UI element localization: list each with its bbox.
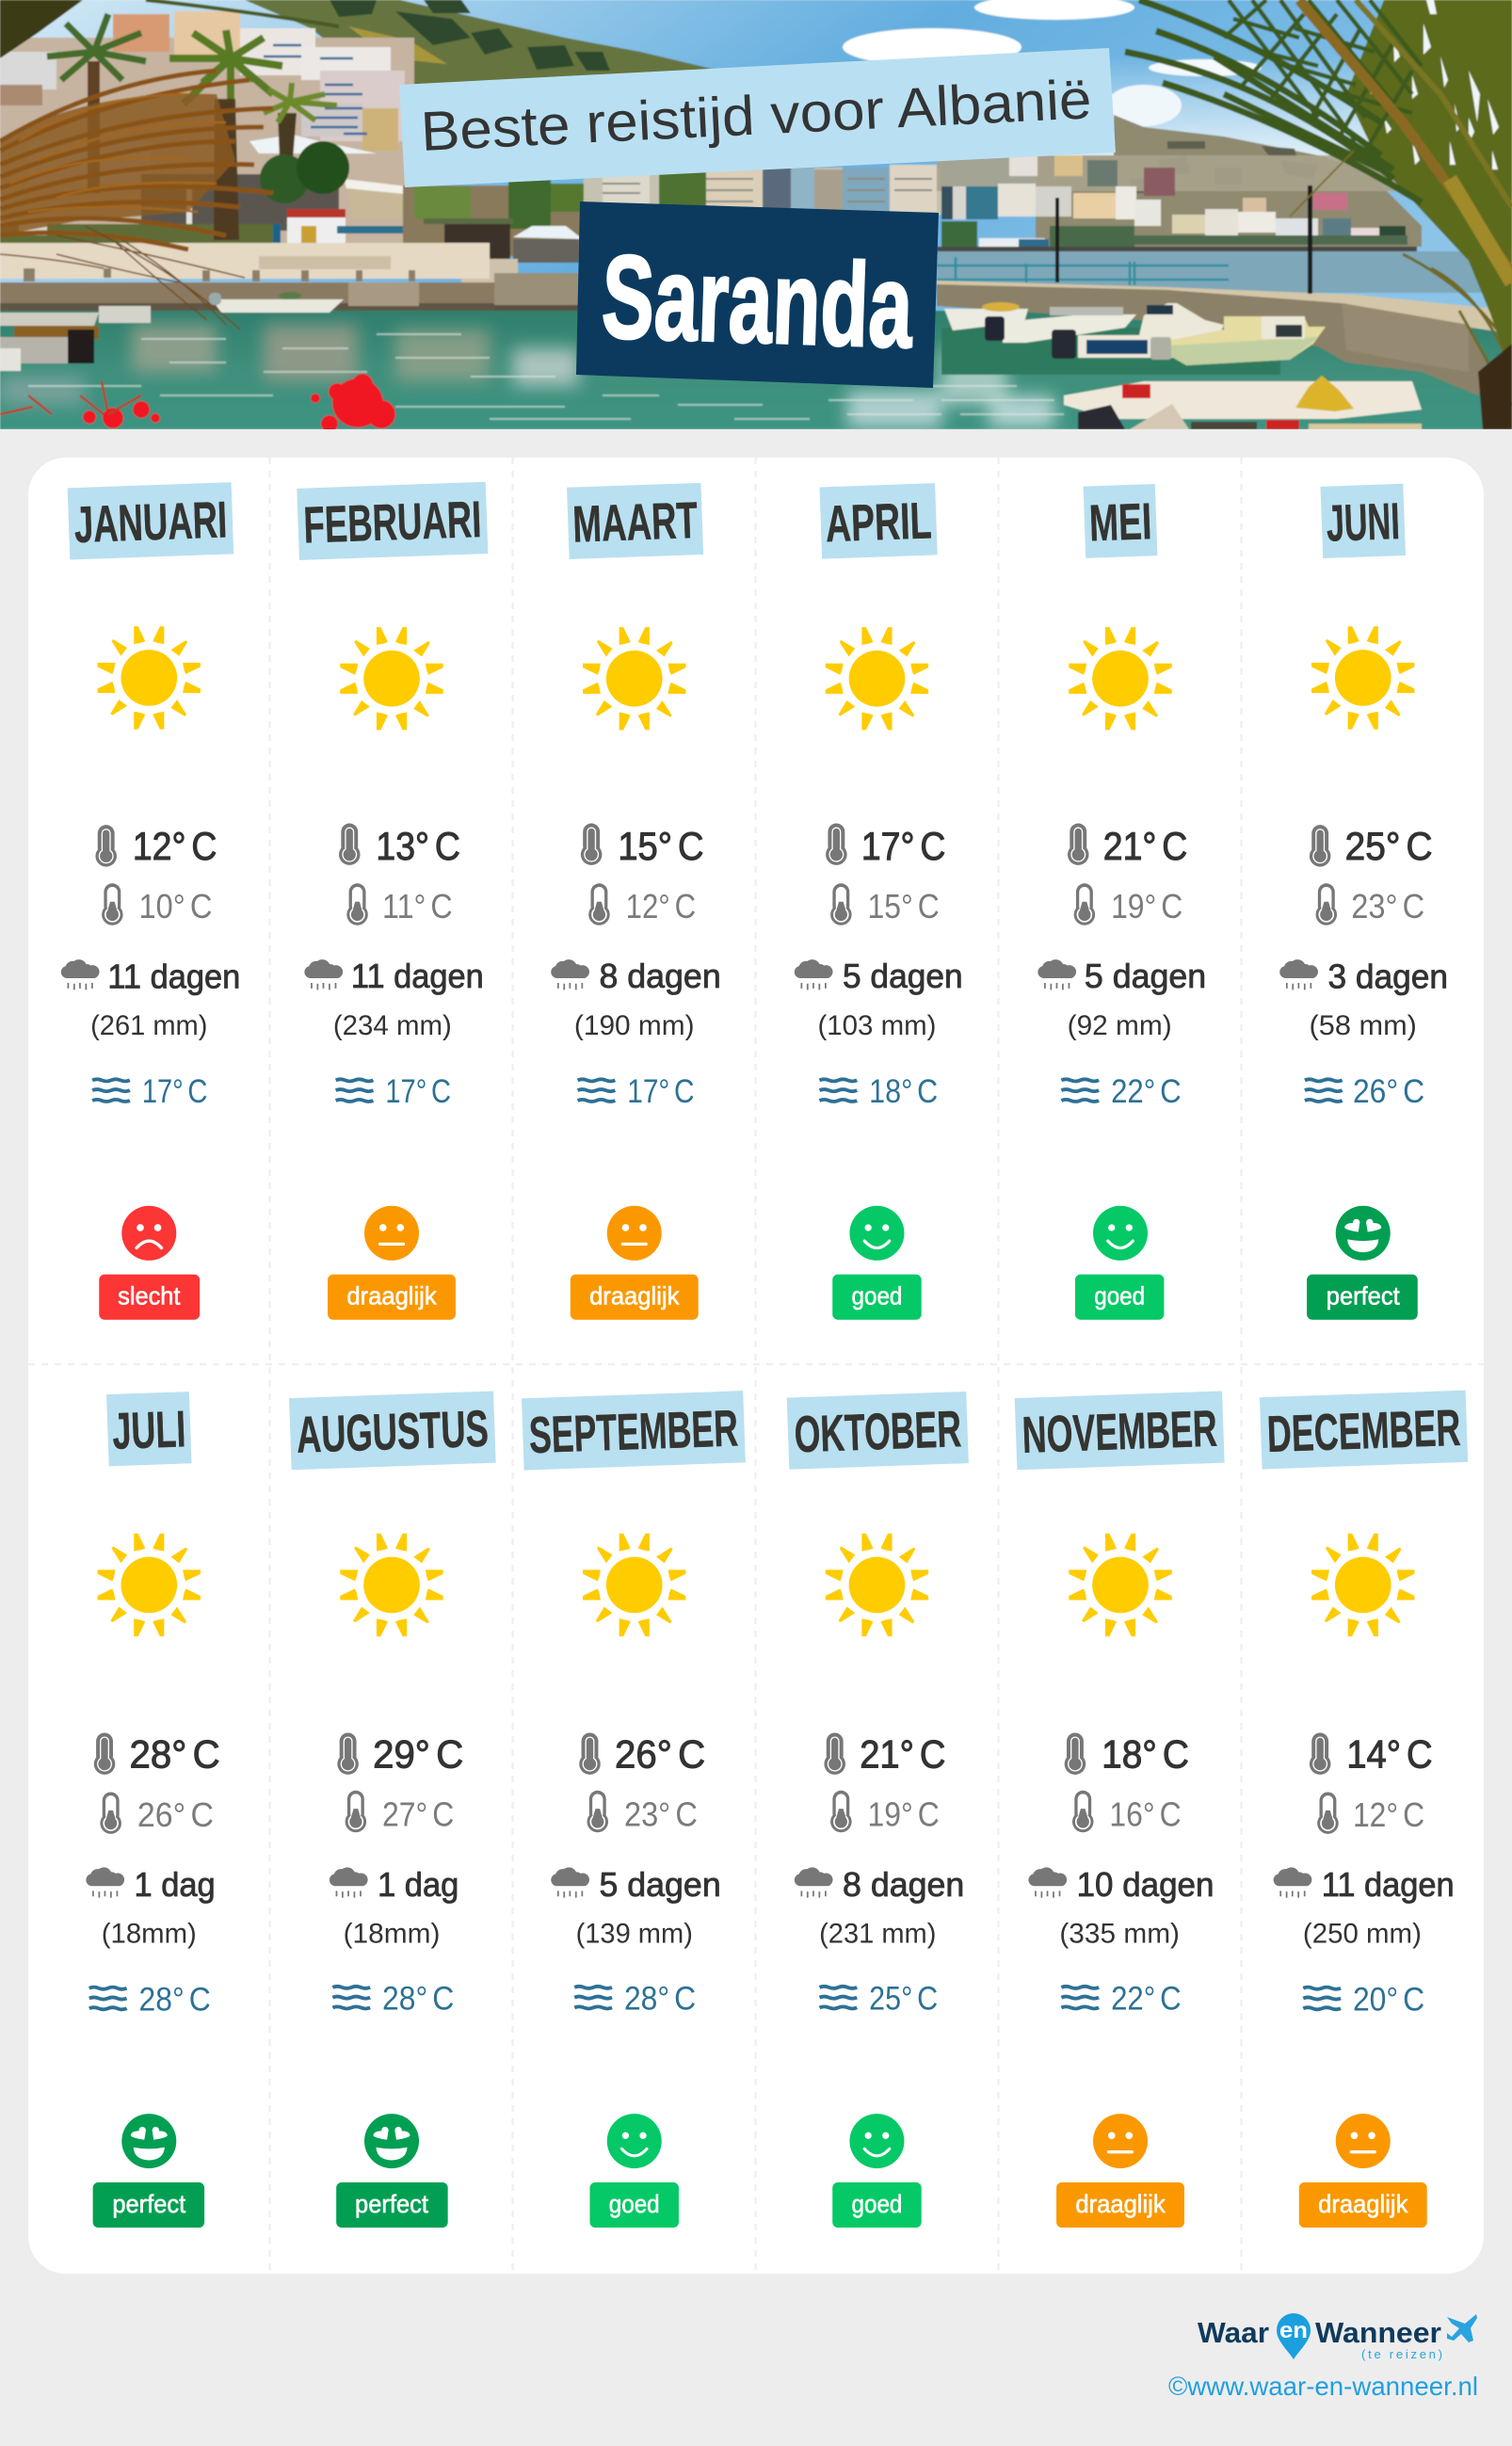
rating: draaglijk (328, 1206, 456, 1320)
icon: sun (1311, 626, 1414, 730)
sea temperature: 28° C (624, 1981, 696, 2018)
heading juli (106, 1392, 192, 1466)
sea temperature: 17° C (385, 1073, 451, 1110)
rating: draaglijk: draaglijk (1318, 2190, 1408, 2218)
city name box: Saranda (576, 201, 939, 388)
heading oktober: OKTOBER (794, 1399, 962, 1463)
rainfall: (58 mm) (1310, 1010, 1417, 1041)
sea temperature (89, 1981, 211, 2018)
low temperature (1072, 1791, 1182, 1834)
heading maart: MAART (571, 491, 699, 554)
low temperature: 27° C (382, 1795, 454, 1834)
heading april (819, 483, 938, 559)
low temperature (1316, 883, 1424, 925)
sea temperature: 25° C (869, 1981, 938, 2018)
heading januari (68, 482, 233, 559)
heading januari: JANUARI (73, 490, 228, 554)
sea temperature (1305, 1073, 1424, 1110)
heading september (522, 1391, 746, 1471)
high temperature: 15° C (618, 825, 703, 868)
high temperature: 18° C (1102, 1732, 1189, 1776)
rain days (86, 1865, 216, 1904)
sea temperature (819, 1073, 938, 1110)
rating: perfect: perfect (112, 2190, 186, 2218)
sea temperature: 20° C (1353, 1981, 1424, 2018)
icon: sun (98, 1534, 201, 1636)
weather card (28, 458, 1484, 2274)
high temperature (581, 824, 703, 868)
city name box: Saranda: Saranda (600, 230, 915, 373)
rain days: 1 dag (135, 1865, 216, 1904)
rainfall: (18mm) (344, 1919, 440, 1950)
sea temperature: 28° C (382, 1981, 454, 2018)
icon: sun (340, 1534, 443, 1636)
logo: Waar en Wanneer (1198, 2313, 1477, 2361)
rain days: 5 dagen (843, 957, 963, 995)
low temperature (346, 1791, 454, 1834)
rating: slecht: slecht (118, 1282, 181, 1310)
low temperature: 26° C (137, 1795, 214, 1834)
panel: augustus (289, 1392, 496, 2228)
rating: goed (832, 2114, 922, 2228)
icon: sun (98, 626, 201, 730)
heading mei: MEI (1088, 491, 1152, 552)
low temperature: 11° C (382, 887, 453, 925)
rain days: 5 dagen (1085, 957, 1206, 995)
low temperature (830, 1791, 940, 1834)
icon: sun (826, 1534, 928, 1636)
low temperature (830, 883, 940, 925)
rain days: 1 dag (378, 1865, 458, 1904)
heading juni (1321, 484, 1406, 558)
rating: goed: goed (852, 2190, 902, 2218)
heading november (1015, 1391, 1225, 1470)
rainfall: (335 mm) (1059, 1919, 1180, 1950)
rain days: 8 dagen (843, 1865, 964, 1904)
icon: sun (583, 627, 685, 730)
high temperature: 14° C (1346, 1732, 1432, 1776)
rain days: 11 dagen (107, 957, 240, 996)
rating: goed: goed (852, 1282, 902, 1310)
low temperature (588, 883, 696, 925)
panel: september (522, 1391, 746, 2228)
low temperature: 12° C (626, 887, 696, 925)
low temperature (1074, 883, 1182, 925)
low temperature (102, 883, 212, 925)
icon: sun (826, 627, 928, 730)
low temperature (346, 883, 453, 925)
rainfall: (234 mm) (333, 1010, 452, 1041)
title banner (399, 48, 1116, 187)
high temperature: 29° C (373, 1732, 463, 1776)
sea temperature: 17° C (627, 1073, 695, 1110)
sea temperature (1061, 1073, 1182, 1110)
high temperature: 12° C (133, 825, 217, 868)
low temperature (1317, 1792, 1424, 1834)
high temperature (339, 824, 460, 868)
sea temperature (336, 1073, 451, 1110)
sea temperature (332, 1981, 454, 2018)
heading juli: JULI (111, 1399, 186, 1460)
rating: slecht (99, 1206, 200, 1320)
heading juni: JUNI (1326, 491, 1401, 553)
high temperature: 26° C (615, 1732, 705, 1776)
panel: april (795, 483, 963, 1320)
heading augustus: AUGUSTUS (296, 1399, 490, 1464)
header photo: Saranda harbour (0, 0, 1512, 432)
title banner: Beste reistijd voor Albanië (419, 68, 1093, 163)
low temperature: 12° C (1353, 1795, 1424, 1834)
rainfall: (231 mm) (819, 1919, 936, 1950)
rain days (1279, 957, 1448, 996)
rain days (795, 957, 963, 995)
heading november: NOVEMBER (1021, 1399, 1218, 1464)
logo: Waar en Wanneer: Wanneer (1315, 2316, 1441, 2349)
high temperature: 21° C (860, 1732, 945, 1776)
month grid (61, 482, 1468, 2228)
rating: perfect (1307, 1206, 1418, 1320)
heading oktober (787, 1392, 969, 1470)
rain days: 8 dagen (599, 957, 721, 995)
sea temperature (578, 1073, 695, 1110)
low temperature: 23° C (624, 1795, 698, 1834)
sea temperature: 26° C (1353, 1073, 1424, 1110)
rating: draaglijk: draaglijk (1075, 2190, 1166, 2218)
heading februari: FEBRUARI (302, 490, 482, 555)
rain days: 10 dagen (1077, 1865, 1214, 1904)
rating: goed: goed (609, 2190, 660, 2218)
low temperature (100, 1792, 214, 1834)
low temperature: 19° C (868, 1795, 940, 1834)
rating: goed: goed (1094, 1282, 1145, 1310)
rating: perfect: perfect (355, 2190, 429, 2218)
sea temperature (1303, 1981, 1424, 2018)
logo: Waar en Wanneer: (te reizen) (1361, 2347, 1442, 2361)
high temperature: 28° C (130, 1732, 220, 1776)
rainfall: (18mm) (102, 1919, 197, 1950)
rain days: 3 dagen (1327, 957, 1448, 996)
high temperature: 17° C (861, 825, 945, 868)
low temperature: 16° C (1109, 1795, 1182, 1834)
panel: juli (86, 1392, 220, 2228)
rain days (330, 1865, 458, 1904)
high temperature (824, 1732, 945, 1776)
panel: januari (61, 482, 240, 1320)
icon: sun (583, 1534, 685, 1636)
rating: draaglijk (571, 1206, 699, 1320)
heading februari (297, 482, 488, 560)
sea temperature (819, 1981, 938, 2018)
panel: juni (1279, 484, 1448, 1320)
low temperature: 23° C (1351, 887, 1424, 925)
sea temperature (574, 1981, 696, 2018)
logo: Waar en Wanneer: en (1279, 2318, 1308, 2343)
rating: draaglijk: draaglijk (589, 1282, 680, 1310)
heading april: APRIL (825, 491, 933, 553)
icon: sun (1069, 1534, 1172, 1636)
low temperature (587, 1791, 698, 1834)
low temperature: 10° C (139, 887, 212, 925)
panel: oktober (787, 1392, 969, 2228)
heading augustus (289, 1392, 496, 1470)
rating: draaglijk: draaglijk (346, 1282, 437, 1310)
high temperature (95, 825, 217, 868)
rating: goed (589, 2114, 679, 2228)
rating: perfect (336, 2114, 448, 2228)
icon: sun (340, 627, 443, 730)
rainfall: (190 mm) (574, 1010, 695, 1041)
logo: Waar en Wanneer: Waar (1198, 2316, 1269, 2349)
sea temperature: 17° C (142, 1073, 207, 1110)
panel: februari (297, 482, 488, 1320)
panel: mei (1037, 484, 1206, 1320)
rating: goed (832, 1206, 922, 1320)
rainfall: (250 mm) (1303, 1919, 1422, 1950)
panel: december (1260, 1391, 1468, 2228)
sea temperature: 22° C (1111, 1981, 1182, 2018)
rating: perfect (93, 2114, 204, 2228)
icon: sun (1069, 627, 1172, 730)
heading mei (1084, 484, 1157, 558)
panel: maart (551, 483, 721, 1320)
low temperature: 15° C (868, 887, 940, 925)
icon: sun (1311, 1534, 1414, 1636)
high temperature: 13° C (376, 825, 460, 868)
sea temperature: 22° C (1111, 1073, 1182, 1110)
high temperature: 21° C (1103, 825, 1187, 868)
rain days: 11 dagen (1322, 1865, 1455, 1904)
rain days: 5 dagen (599, 1865, 721, 1904)
high temperature (1068, 824, 1187, 868)
high temperature (1065, 1732, 1189, 1776)
rating: perfect: perfect (1327, 1282, 1400, 1310)
high temperature (1310, 825, 1432, 868)
rating: goed (1075, 1206, 1164, 1320)
rating: draaglijk (1299, 2114, 1427, 2228)
rainfall: (92 mm) (1068, 1010, 1172, 1041)
heading maart (567, 483, 703, 559)
sea temperature: 28° C (139, 1981, 211, 2018)
rainfall: (261 mm) (90, 1010, 207, 1041)
rainfall: (139 mm) (576, 1919, 693, 1950)
website url: ©www.waar-en-wanneer.nl (1168, 2372, 1478, 2401)
panel: november (1015, 1391, 1225, 2228)
high temperature: 25° C (1345, 825, 1432, 868)
sea temperature (92, 1073, 207, 1110)
rainfall: (103 mm) (817, 1010, 936, 1041)
high temperature (1310, 1732, 1432, 1776)
high temperature (826, 824, 945, 868)
low temperature: 19° C (1111, 887, 1182, 925)
heading september: SEPTEMBER (528, 1398, 739, 1464)
rain days: 11 dagen (351, 957, 484, 995)
sea temperature (1061, 1981, 1182, 2018)
sea temperature: 18° C (869, 1073, 938, 1110)
rating: draaglijk (1056, 2114, 1184, 2228)
